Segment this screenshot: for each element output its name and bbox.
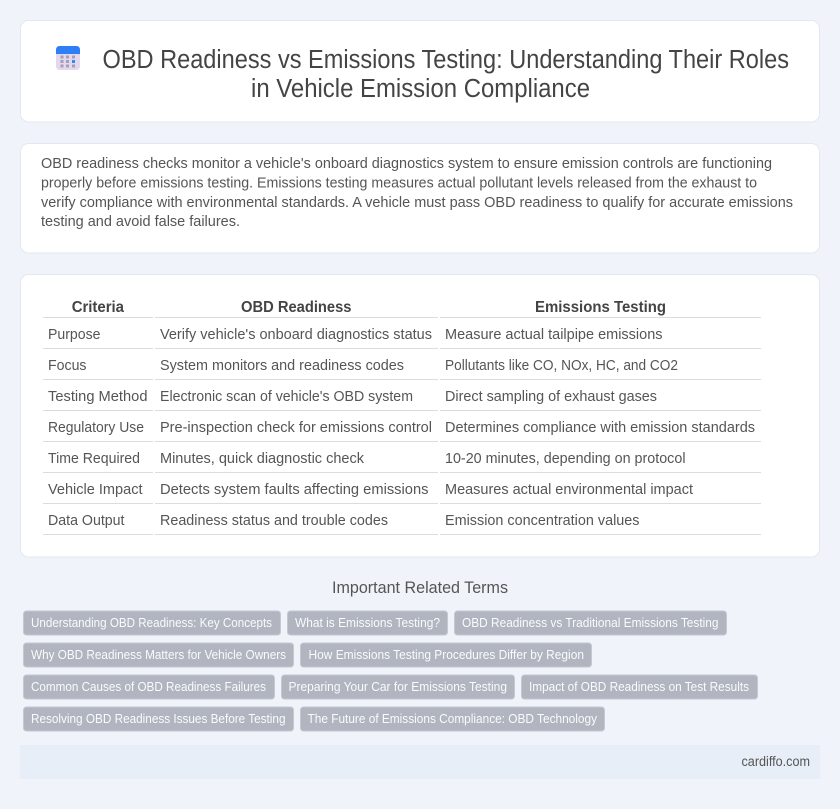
- row: focus: Pollutants like CO, NOx, HC, and CO2: [445, 358, 678, 374]
- row: data output: Data Output: [48, 513, 124, 529]
- row: purpose: [48, 327, 662, 343]
- tag row 1: [24, 611, 726, 635]
- tag row 2: Why OBD Readiness Matters for Vehicle Owners: [31, 648, 286, 662]
- row: data output: [48, 513, 640, 529]
- row: time required: [48, 451, 686, 467]
- tag row 4: The Future of Emissions Compliance: OBD Technology: [308, 712, 598, 726]
- panel: description: testing and avoid false failures.: [41, 214, 240, 230]
- footer: [20, 745, 820, 779]
- row: testing method: Testing Method: [48, 389, 148, 405]
- row: time required: 10-20 minutes, depending on protocol: [445, 451, 686, 467]
- panel: description: [20, 144, 820, 253]
- row: vehicle impact: Measures actual environmental impact: [445, 482, 693, 498]
- row: testing method: [48, 389, 657, 405]
- panel: description: verify compliance with environmental standards. A vehicle must pass OBD readiness to qualify for accurate emissions: [41, 195, 793, 211]
- tag row 3: Preparing Your Car for Emissions Testing: [288, 680, 507, 694]
- row: purpose: Purpose: [48, 327, 100, 343]
- row: time required: Time Required: [48, 451, 140, 467]
- title: OBD Readiness vs Emissions Testing: Understanding Their Roles: [102, 46, 789, 74]
- tag row 4: Resolving OBD Readiness Issues Before Testing: [31, 712, 286, 726]
- title: in Vehicle Emission Compliance: [251, 75, 590, 103]
- table header: Emissions Testing: [535, 299, 666, 316]
- row: regulatory use: Pre-inspection check for emissions control: [160, 420, 432, 436]
- tag row 1: What is Emissions Testing?: [295, 616, 440, 630]
- tag row 2: How Emissions Testing Procedures Differ by Region: [308, 648, 584, 662]
- tag row 1: Understanding OBD Readiness: Key Concepts: [31, 616, 272, 630]
- row: vehicle impact: Vehicle Impact: [48, 482, 142, 498]
- row: purpose: Verify vehicle's onboard diagnostics status: [160, 327, 432, 343]
- icon: calendar: [56, 46, 80, 70]
- row: focus: Focus: [48, 358, 86, 374]
- row: purpose: Measure actual tailpipe emissions: [445, 327, 662, 343]
- row: regulatory use: Regulatory Use: [48, 420, 144, 436]
- panel: description: OBD readiness checks monitor a vehicle's onboard diagnostics system to ensure emission controls are functioning: [41, 156, 772, 172]
- panel: description: properly before emissions testing. Emissions testing measures actual pollutant levels released from the exhaust to: [41, 176, 757, 192]
- table header: OBD Readiness: [241, 299, 352, 316]
- heading: related terms: Important Related Terms: [332, 579, 508, 597]
- panel: comparison table: [20, 274, 820, 557]
- row: regulatory use: [48, 420, 755, 436]
- table header: Criteria: [72, 299, 124, 316]
- title: [102, 46, 789, 103]
- row: data output: Readiness status and trouble codes: [160, 513, 388, 529]
- row: testing method: Electronic scan of vehicle's OBD system: [160, 389, 413, 405]
- panel: related term tags: [24, 611, 758, 731]
- row: focus: [48, 358, 678, 374]
- tag row 4: [24, 707, 604, 731]
- panel: title card: [20, 20, 820, 122]
- tag row 3: Common Causes of OBD Readiness Failures: [31, 680, 266, 694]
- tag row 3: Impact of OBD Readiness on Test Results: [529, 680, 749, 694]
- table header: [72, 299, 666, 316]
- row: data output: Emission concentration values: [445, 513, 640, 529]
- tag row 2: [24, 643, 592, 667]
- footer: cardiffo.com: [742, 754, 810, 769]
- row: regulatory use: Determines compliance with emission standards: [445, 420, 755, 436]
- row: testing method: Direct sampling of exhaust gases: [445, 389, 657, 405]
- row: vehicle impact: Detects system faults affecting emissions: [160, 482, 428, 498]
- row: time required: Minutes, quick diagnostic check: [160, 451, 365, 467]
- tag row 3: [24, 675, 758, 699]
- row: focus: System monitors and readiness codes: [160, 358, 404, 374]
- tag row 1: OBD Readiness vs Traditional Emissions Testing: [462, 616, 718, 630]
- row: vehicle impact: [48, 482, 693, 498]
